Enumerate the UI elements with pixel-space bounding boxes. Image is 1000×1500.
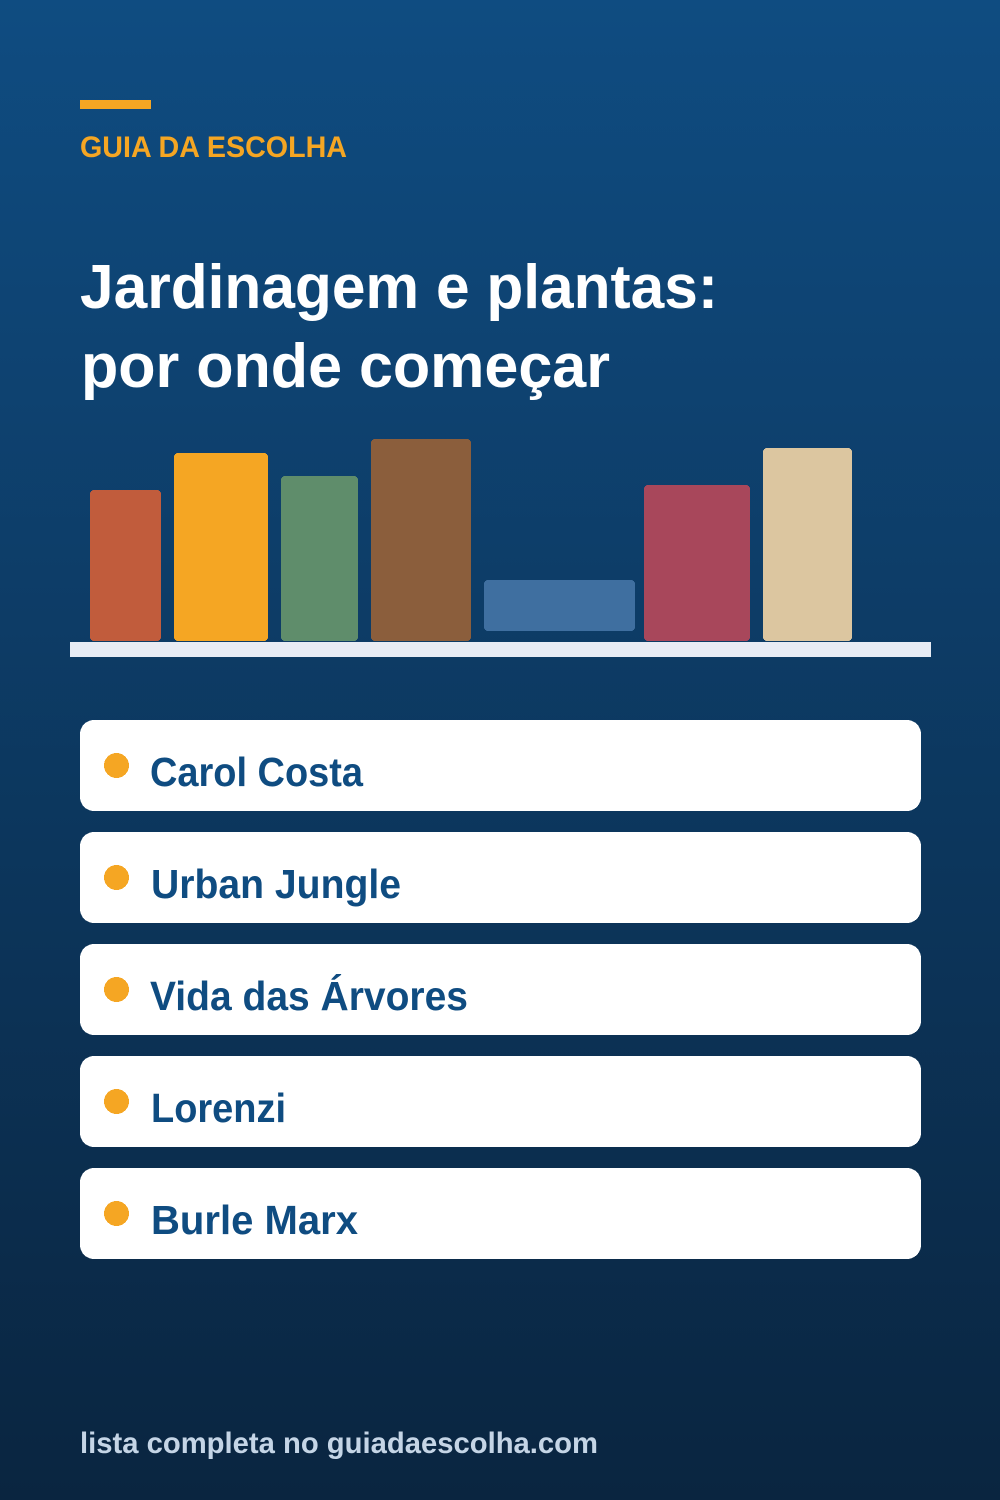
book: blue lying flat xyxy=(484,580,635,631)
title xyxy=(80,253,718,401)
card: Lorenzi xyxy=(80,1056,921,1147)
list of names xyxy=(80,720,921,1259)
card: Lorenzi: Lorenzi xyxy=(151,1085,286,1131)
book: green xyxy=(281,476,358,641)
card: Urban Jungle: Urban Jungle xyxy=(151,861,401,907)
card: Vida das Árvores xyxy=(80,944,921,1035)
shelf xyxy=(70,642,931,657)
title: Jardinagem e plantas: xyxy=(80,253,718,322)
bookshelf illustration xyxy=(70,439,931,657)
book: beige xyxy=(763,448,852,641)
card: Vida das Árvores: Vida das Árvores xyxy=(150,973,468,1019)
card: Burle Marx: Burle Marx xyxy=(151,1197,358,1243)
card: Carol Costa: Carol Costa xyxy=(150,749,364,795)
book: orange xyxy=(174,453,268,641)
card: Urban Jungle xyxy=(80,832,921,923)
footer text: lista completa no guiadaescolha.com xyxy=(80,1427,598,1460)
book: brown xyxy=(371,439,471,641)
book: terracotta xyxy=(90,490,161,641)
card: Burle Marx xyxy=(80,1168,921,1259)
title: por onde começar xyxy=(81,332,610,401)
book: red xyxy=(644,485,750,641)
eyebrow label: GUIA DA ESCOLHA xyxy=(80,131,347,164)
card: Carol Costa xyxy=(80,720,921,811)
accent bar xyxy=(80,100,151,109)
